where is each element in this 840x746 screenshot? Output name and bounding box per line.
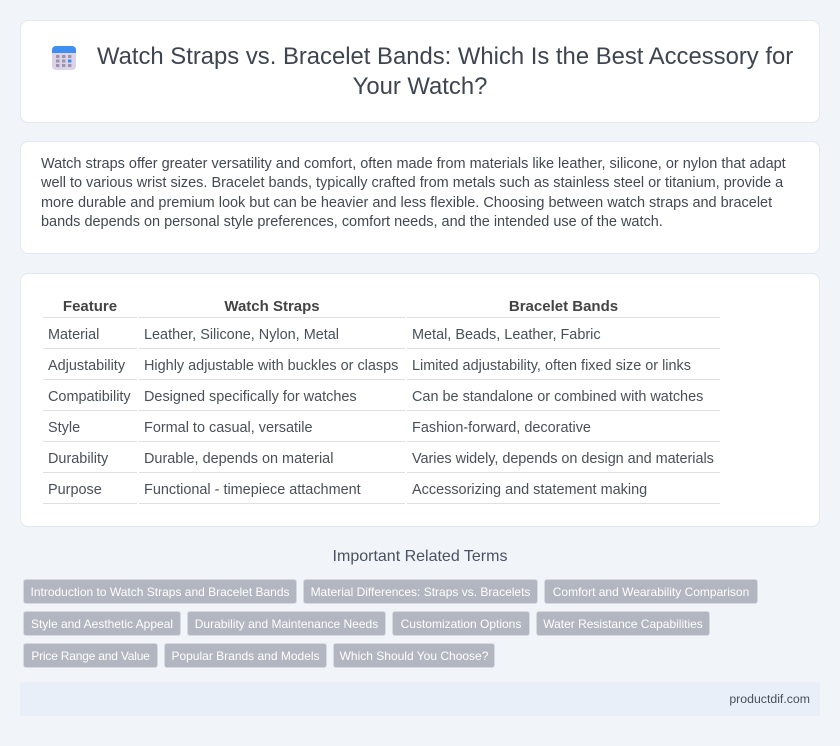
intro card [20,141,820,254]
comparison table: Durable, depends on material [144,451,333,467]
tag [23,579,297,604]
comparison table: Functional - timepiece attachment [144,482,361,498]
header: bracelet bands: Bracelet Bands [509,298,618,315]
tag [333,643,495,668]
heading line 2: Your Watch? [353,73,487,100]
comparison table: Formal to casual, versatile [144,420,312,436]
tag: Customization Options [401,617,521,631]
tag [23,643,158,668]
comparison table: Can be standalone or combined with watches [412,389,703,405]
comparison table: Leather, Silicone, Nylon, Metal [144,327,339,343]
heading: Watch Straps vs. Bracelet Bands: Which Is the Best Accessory for [97,43,793,70]
intro text: well to various wrist sizes. Bracelet bands, typically crafted from metals such as stainless steel or titanium, provide a [41,175,783,191]
comparison table: Metal, Beads, Leather, Fabric [412,327,601,343]
tag: Price Range and Value [31,649,150,663]
footer source: productdif.com [729,692,810,706]
row: style: Style [48,420,80,436]
related terms tags [23,579,758,668]
comparison table card [20,273,820,527]
comparison table [43,298,720,504]
header: watch straps: Watch Straps [224,298,320,315]
tag [303,579,538,604]
tag [187,611,386,636]
tag: Durability and Maintenance Needs [195,617,378,631]
row: purpose: Purpose [48,482,102,498]
tag: Water Resistance Capabilities [543,617,703,631]
comparison table: Varies widely, depends on design and materials [412,451,714,467]
tag: Which Should You Choose? [340,649,488,663]
comparison table: Highly adjustable with buckles or clasps [144,358,398,374]
title card [20,20,820,123]
related terms heading: Important Related Terms [333,548,507,565]
icon: calendar [52,46,76,70]
tag: Style and Aesthetic Appeal [31,617,173,631]
row: compatibility: Compatibility [48,389,131,405]
row: durability: Durability [48,451,108,467]
comparison table: Limited adjustability, often fixed size or links [412,358,691,374]
row: material: Material [48,327,99,343]
header: feature: Feature [63,298,117,315]
intro text [41,156,786,230]
intro text: bands depends on personal style preferences, comfort needs, and the intended use of the watch. [41,214,663,230]
footer [20,682,820,716]
tag [392,611,530,636]
tag [23,611,181,636]
tag [544,579,758,604]
tag [164,643,327,668]
comparison table: Accessorizing and statement making [412,482,647,498]
tag: Comfort and Wearability Comparison [553,585,749,599]
tag: Material Differences: Straps vs. Bracelets [311,585,530,599]
row: adjustability: Adjustability [48,358,125,374]
tag [536,611,710,636]
tag: Popular Brands and Models [171,649,320,663]
intro text: Watch straps offer greater versatility and comfort, often made from materials like leather, silicone, or nylon that adapt [41,156,786,172]
tag: Introduction to Watch Straps and Bracelet Bands [30,585,290,599]
intro text: more durable and premium look but can be heavier and less flexible. Choosing between watch straps and bracelet [41,194,772,210]
comparison table: Fashion-forward, decorative [412,420,591,436]
comparison table: Designed specifically for watches [144,389,357,405]
